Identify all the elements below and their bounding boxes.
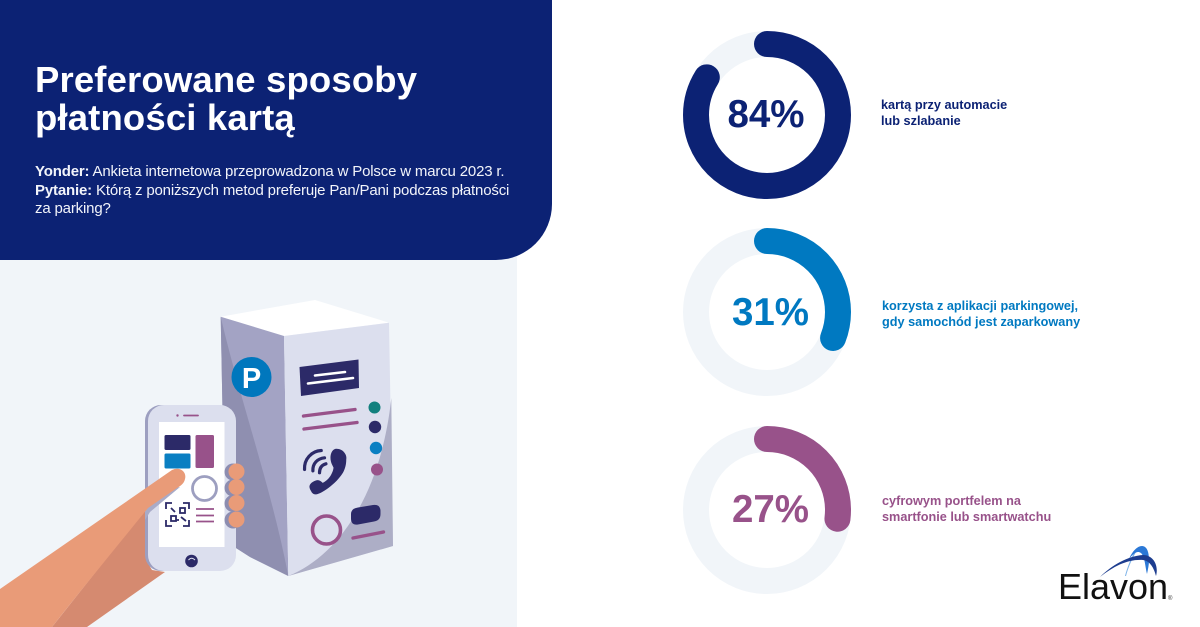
icon: phone — [145, 405, 236, 571]
label: 84%: kartą przy automacie — [881, 98, 1007, 112]
logo: Elavon: Elavon — [1058, 566, 1168, 607]
label: 84%: lub szlabanie — [881, 114, 961, 128]
icon: arm shadow behind phone — [52, 506, 165, 627]
text block: survey details: za parking? — [35, 200, 111, 217]
value: 31%: 31% — [732, 291, 809, 334]
terminal line — [353, 532, 384, 538]
panel: header banner — [0, 0, 552, 260]
title — [35, 59, 417, 138]
icon: phone with signal — [305, 449, 346, 494]
terminal ring — [312, 516, 340, 544]
icon: finger shadow — [145, 487, 180, 520]
label: 31%: gdy samochód jest zaparkowany — [882, 315, 1080, 329]
list lines — [196, 509, 214, 522]
label: 31%: korzysta z aplikacji parkingowej, — [882, 299, 1078, 313]
label: 27%: cyfrowym portfelem na — [882, 494, 1021, 508]
home button — [185, 555, 198, 567]
terminal text lines — [304, 410, 357, 429]
label: 84% — [881, 98, 1007, 128]
chart: donut 27% — [696, 439, 838, 581]
logo: Elavon: ® — [1168, 595, 1173, 602]
icon: P badge: P — [242, 363, 261, 395]
icon: parking terminal — [221, 300, 393, 576]
terminal display — [300, 360, 359, 396]
title: płatności kartą — [35, 97, 295, 138]
panel: light illustration background — [0, 240, 517, 627]
value: 84%: 84% — [727, 93, 805, 136]
icon: hand fingers — [224, 464, 244, 528]
ring button — [192, 476, 216, 500]
icon: QR code — [166, 503, 189, 526]
terminal card slot — [351, 505, 380, 525]
text block: survey details — [35, 163, 509, 217]
terminal buttons — [368, 402, 383, 476]
chart: donut 84% — [696, 44, 838, 186]
app tiles — [164, 435, 190, 450]
label: 27%: smartfonie lub smartwatchu — [882, 510, 1051, 524]
label: 27% — [882, 494, 1051, 524]
label: 31% — [882, 299, 1080, 329]
text block: survey details: Pytanie: Którą z poniższych metod preferuje Pan/Pani podczas płatności — [35, 182, 509, 199]
logo: Elavon — [1058, 546, 1173, 607]
chart: donut 31% — [696, 241, 838, 383]
text block: survey details: Yonder: Ankieta internetowa przeprowadzona w Polsce w marcu 2023 r. — [35, 163, 504, 180]
icon: arm and pointing finger — [0, 469, 185, 627]
value: 27%: 27% — [732, 488, 809, 531]
title: Preferowane sposoby — [35, 59, 417, 100]
icon: P badge — [232, 357, 272, 397]
